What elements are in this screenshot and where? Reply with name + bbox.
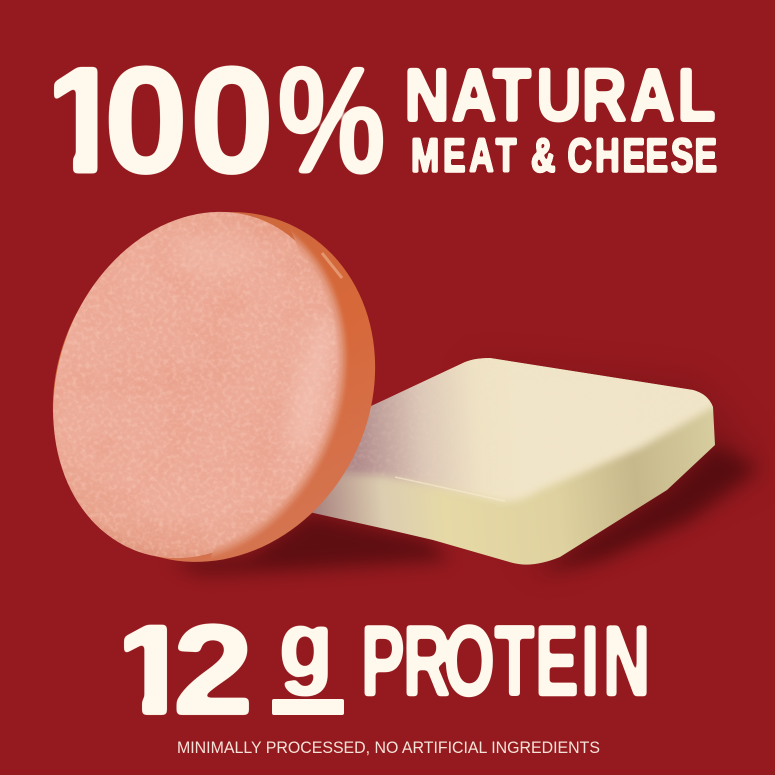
sausage cut face	[6, 171, 390, 599]
stat: 12 g: 2	[173, 598, 253, 741]
cast shadows	[170, 365, 765, 574]
footnote: MINIMALLY PROCESSED, NO ARTIFICIAL INGREDIENTS	[177, 739, 600, 757]
stat label: protein: PROTEIN	[361, 605, 650, 716]
stat: 12 g: g	[279, 593, 333, 696]
cheese edge highlight	[395, 477, 505, 501]
cheese surface texture	[351, 426, 388, 468]
heading: 100%	[54, 65, 384, 175]
heading: 100%: %	[277, 36, 386, 206]
cheese slice	[312, 358, 715, 565]
sausage slice	[52, 212, 376, 562]
cheese side	[312, 358, 715, 565]
g underline	[272, 699, 344, 715]
product photo: meat and cheese	[0, 156, 765, 618]
heading: 100%: 1	[41, 36, 126, 206]
stat: 12 g: 1	[111, 599, 195, 741]
stat: 12 g	[124, 623, 344, 716]
heading: 100%: 00	[104, 36, 274, 206]
soft transition between face and rind	[211, 231, 348, 558]
sausage surface texture	[50, 210, 345, 560]
sausage highlight	[322, 253, 342, 278]
sausage rind	[0, 156, 434, 618]
heading: meat and cheese: MEAT & CHEESE	[411, 129, 717, 182]
heading: natural: NATURAL	[404, 54, 715, 137]
cheese top face	[330, 350, 722, 501]
